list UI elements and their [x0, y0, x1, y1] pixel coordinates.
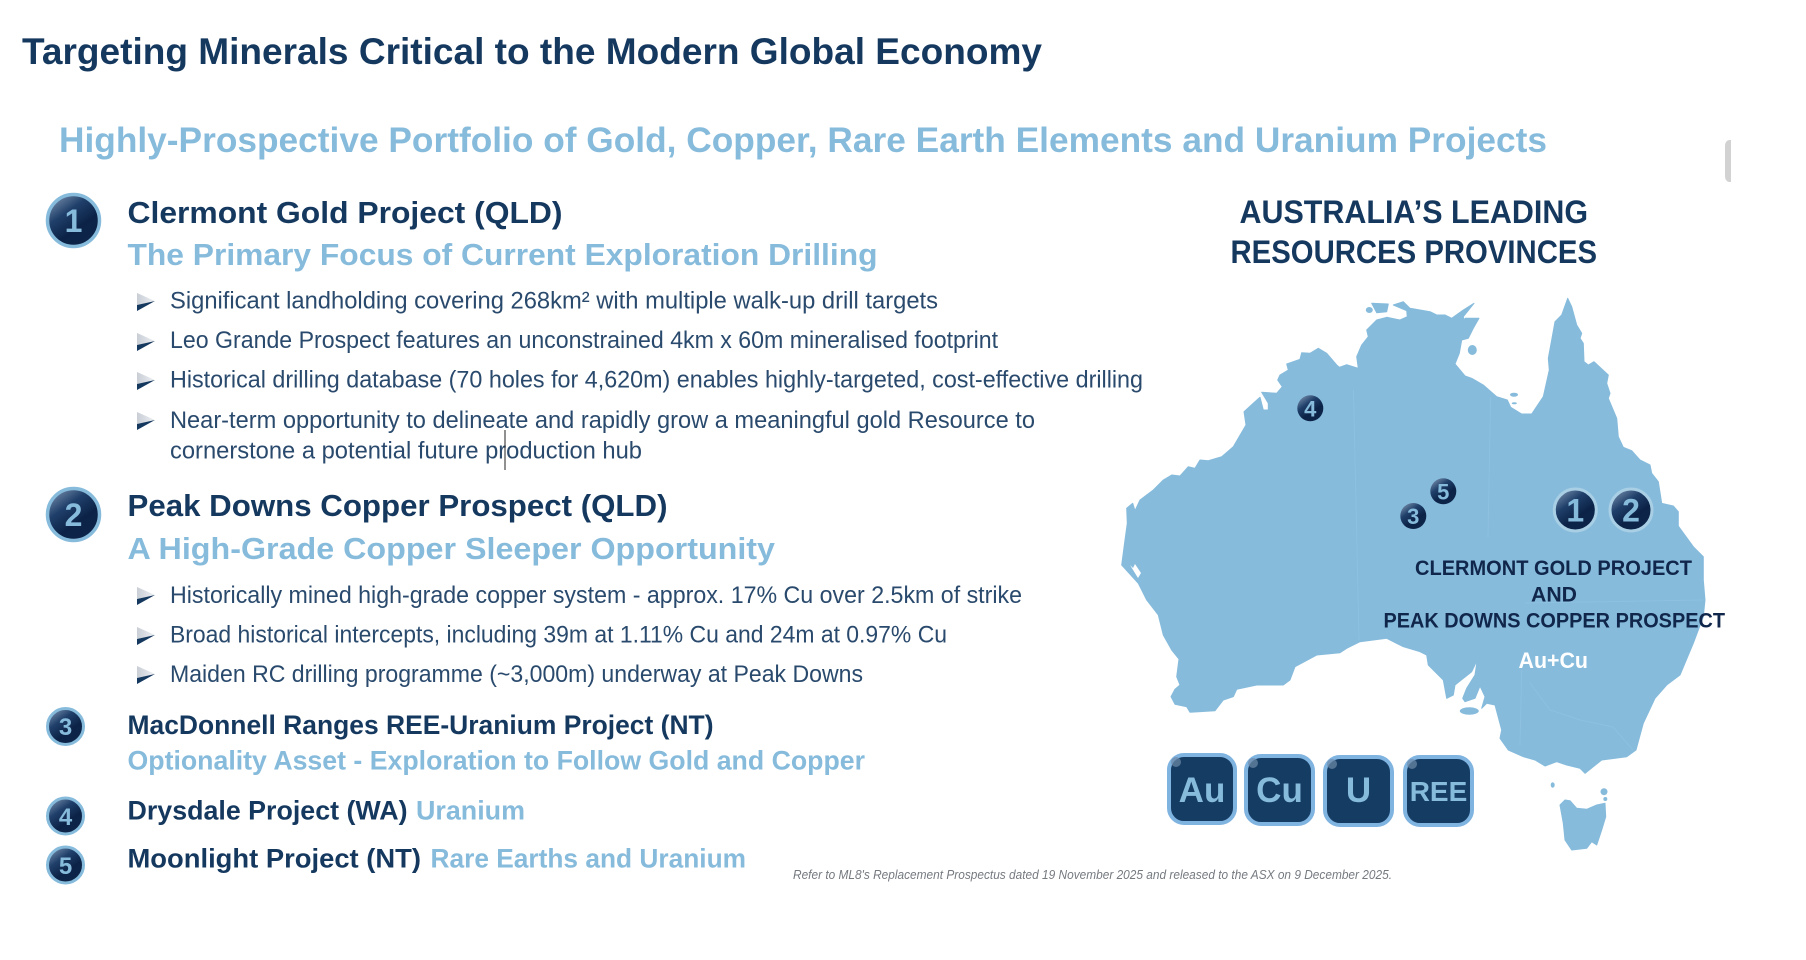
scroll marker — [1725, 140, 1731, 182]
map marker 4: 4 — [1304, 396, 1317, 422]
map heading: AUSTRALIA’S LEADING — [1240, 194, 1588, 230]
heading: Drysdale: Drysdale Project (WA) — [128, 796, 408, 826]
commodity badge: REE — [1405, 757, 1472, 825]
map label: projects: AND — [1531, 584, 1577, 606]
map label: projects: CLERMONT GOLD PROJECT — [1415, 557, 1692, 580]
bullet arrow — [137, 293, 155, 311]
map marker 2 — [1610, 489, 1652, 531]
commodity: Uranium: Uranium — [416, 796, 525, 826]
commodity badge: U — [1325, 757, 1392, 825]
bullet arrow — [137, 333, 155, 351]
commodity: rare earths and uranium: Rare Earths and Uranium — [430, 844, 746, 874]
bullet text: Historically mined high-grade copper system - approx. 17% Cu over 2.5km of strike — [170, 582, 1022, 609]
bullet text: two lines — [170, 407, 1035, 464]
subheading: sleeper opportunity: A High-Grade Copper Sleeper Opportunity — [128, 531, 776, 566]
state borders — [1354, 390, 1703, 750]
number badge 3 — [48, 708, 84, 744]
map marker 3 — [1400, 503, 1426, 529]
map marker 2: 2 — [1622, 492, 1640, 528]
title: Targeting Minerals Critical to the Modern Global Economy — [22, 31, 1042, 72]
map marker 5 — [1430, 478, 1456, 504]
number badge 4 — [48, 798, 84, 834]
section: Peak Downs Copper Prospect — [48, 488, 1022, 688]
subtitle: Highly-Prospective Portfolio of Gold, Copper, Rare Earth Elements and Uranium Projects — [59, 121, 1547, 160]
map marker 4 — [1297, 395, 1323, 422]
bullet arrow — [137, 627, 155, 645]
map marker 5: 5 — [1437, 480, 1449, 504]
section: MacDonnell Ranges — [48, 708, 865, 776]
section: Drysdale Project — [48, 796, 525, 834]
map heading — [1230, 194, 1597, 270]
number badge 5: 5 — [59, 853, 72, 880]
number badge 2 — [48, 488, 100, 540]
bullet text: Historical drilling database (70 holes for 4,620m) enables highly-targeted, cost-effective drilling — [170, 366, 1143, 394]
heading: Moonlight: Moonlight Project (NT) — [128, 844, 421, 874]
text cursor — [504, 430, 506, 470]
map label: projects — [1384, 557, 1725, 632]
number badge 3: 3 — [59, 714, 72, 741]
bullet arrow — [137, 666, 155, 684]
number badge 5 — [48, 847, 84, 883]
subheading: primary focus: The Primary Focus of Current Exploration Drilling — [128, 237, 878, 272]
footnote: Refer to ML8's Replacement Prospectus dated 19 November 2025 and released to the ASX on 9 December 2025. — [793, 868, 1392, 882]
number badge 1 — [48, 194, 100, 246]
Tasmania and islands — [1366, 303, 1608, 850]
heading: MacDonnell Ranges: MacDonnell Ranges REE-Uranium Project (NT) — [128, 710, 714, 740]
bullet text: Significant landholding covering 268km² with multiple walk-up drill targets — [170, 288, 938, 314]
bullet arrow — [137, 587, 155, 605]
commodity badge: Au: Au — [1179, 771, 1225, 810]
heading: Peak Downs: Peak Downs Copper Prospect (QLD) — [128, 488, 668, 523]
bullet arrow — [137, 412, 155, 430]
number badge 2: 2 — [65, 497, 82, 533]
bullet arrow — [137, 372, 155, 390]
bullet list: Clermont — [137, 288, 1143, 470]
bullet text: Broad historical intercepts, including 39m at 1.11% Cu and 24m at 0.97% Cu — [170, 622, 947, 648]
commodity badge: U: U — [1346, 771, 1371, 810]
bullet list: Peak Downs — [137, 582, 1022, 688]
commodity badge: Au — [1169, 755, 1235, 823]
map marker 1: 1 — [1566, 492, 1584, 528]
number badge 1: 1 — [65, 203, 82, 239]
map label: projects: PEAK DOWNS COPPER PROSPECT — [1384, 610, 1725, 632]
subheading: optionality asset: Optionality Asset - Exploration to Follow Gold and Copper — [128, 746, 865, 776]
map marker 3: 3 — [1407, 504, 1419, 529]
map heading: RESOURCES PROVINCES — [1230, 234, 1597, 270]
bullet text: Leo Grande Prospect features an unconstrained 4km x 60m mineralised footprint — [170, 327, 998, 354]
map of Australia — [1122, 298, 1705, 850]
bullet text: Maiden RC drilling programme (~3,000m) underway at Peak Downs — [170, 661, 863, 688]
commodity badge: REE: REE — [1410, 776, 1467, 807]
Shark Bay inlet — [1130, 564, 1141, 578]
map marker 1 — [1554, 489, 1596, 531]
number badge 4: 4 — [59, 804, 73, 831]
heading: Clermont Gold Project: Clermont Gold Project (QLD) — [128, 195, 562, 230]
commodity badge: Cu — [1246, 756, 1313, 824]
section: Moonlight Project — [48, 844, 746, 883]
section: Clermont Gold Project — [48, 194, 1143, 470]
commodity badge: Cu: Cu — [1256, 771, 1303, 810]
map label: Au+Cu: Au+Cu — [1518, 648, 1588, 673]
bullet text: two lines: cornerstone a potential future production hub — [170, 438, 642, 464]
bullet text: two lines: Near-term opportunity to delineate and rapidly grow a meaningful gold Resource to — [170, 407, 1035, 434]
